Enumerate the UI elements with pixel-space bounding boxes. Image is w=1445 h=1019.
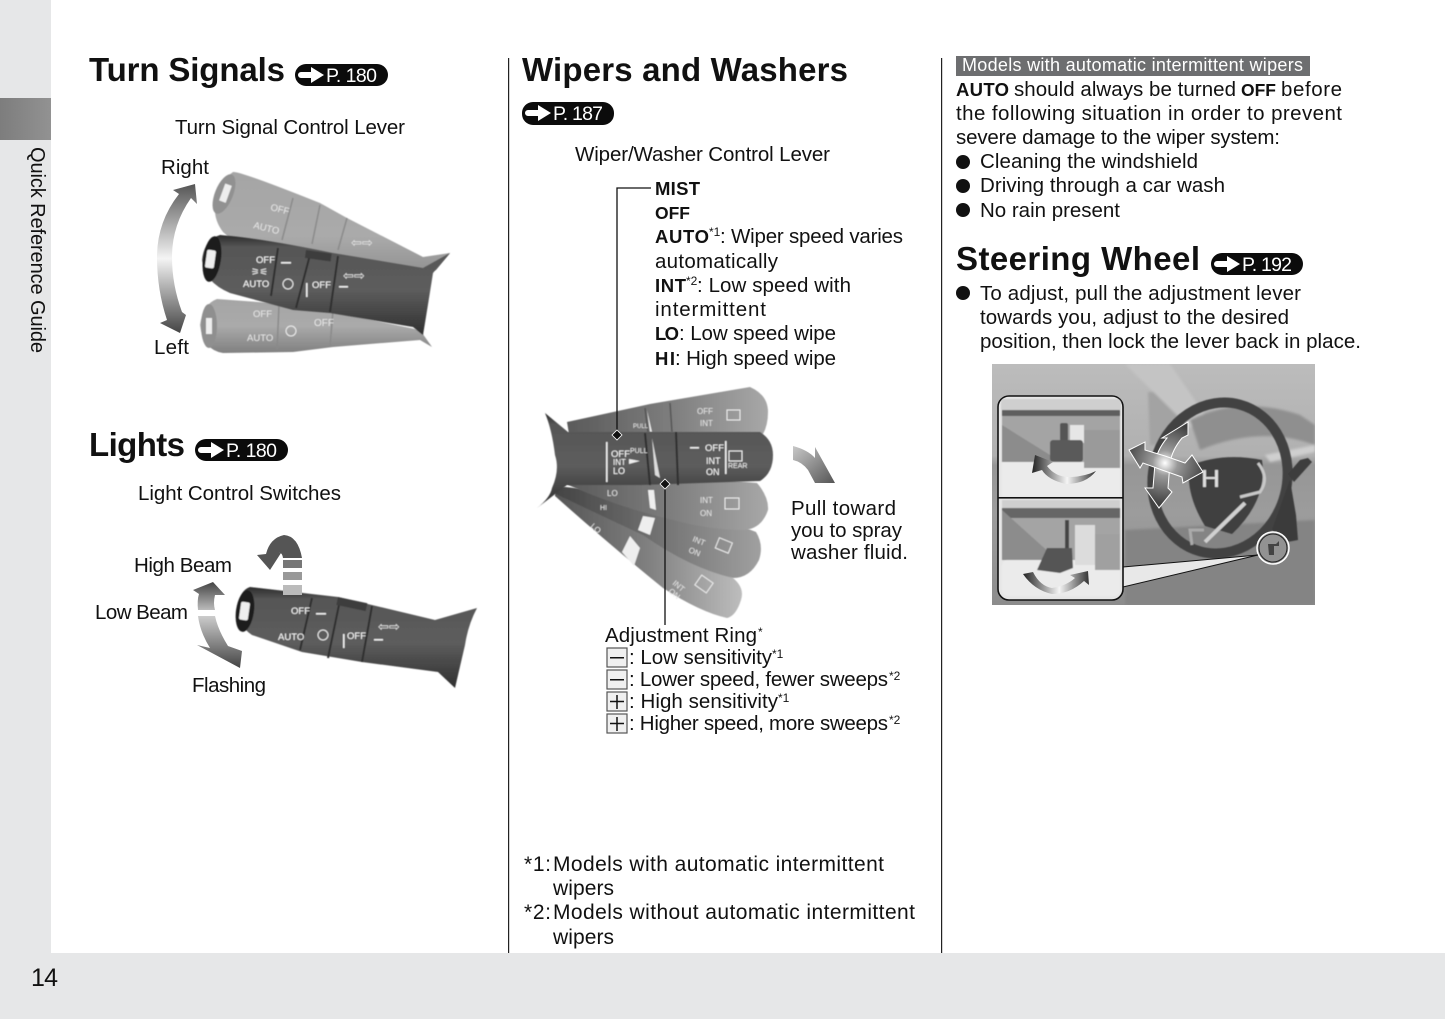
leader line to adjustment ring (664, 486, 666, 625)
marker diamond: ring leader (660, 479, 670, 489)
inset divider (998, 497, 1123, 499)
adjustment ring legend: *1 (778, 691, 790, 705)
wiper settings list: MIST (655, 178, 701, 199)
sidebar label: Quick Reference Guide: Quick Reference Guide (26, 147, 48, 353)
illustration: main wiper lever: REAR (728, 463, 747, 470)
illustration: lowest ghost lever (555, 488, 742, 618)
adjustment ring legend: *1 (772, 647, 784, 661)
illustration: third ghost lever: INT (691, 535, 707, 548)
illustration: lower ghost lever: OFF (314, 318, 334, 329)
wiper settings list (655, 178, 903, 370)
wiper settings list: : High speed wipe (675, 347, 836, 370)
caption: Light Control Switches: Light Control Switches (138, 482, 341, 505)
illustration: upper ghost lever: OFF (269, 202, 291, 218)
illustration: lever (233, 587, 477, 688)
panel: lights (89, 426, 477, 697)
lower inset scene (1001, 500, 1121, 574)
panel: automatic intermittent wipers note (956, 55, 1342, 222)
steering wheel rim and hub (1146, 396, 1312, 558)
text: pull toward you: washer fluid. (790, 541, 908, 564)
footnotes: wipers (552, 926, 614, 949)
page reference P. 180: P. 180 (326, 65, 377, 87)
heading: Lights: Lights (89, 426, 185, 463)
illustration: lowest ghost lever: LO (589, 522, 603, 535)
illustration: main wiper lever: INT (706, 456, 721, 466)
illustration: lower ghost lever: OFF (253, 309, 272, 320)
adjustment ring legend: *2 (889, 713, 901, 727)
paragraph: the following situation in order to prevent (956, 102, 1342, 125)
wiper settings list: AUTO (655, 226, 709, 247)
icon: low beam and flashing arrows (193, 582, 242, 668)
lower inset arrow (1023, 571, 1089, 594)
adjustment instructions: position, then lock the lever back in place. (980, 330, 1361, 353)
paragraph: AUTO (956, 79, 1009, 100)
illustration: upper ghost lever: INT (700, 419, 713, 428)
tag text: Models with automatic intermittent wipers (962, 55, 1303, 75)
illustration: upper ghost lever: AUTO (252, 220, 280, 237)
wiper settings list: automatically (655, 250, 779, 273)
label: Flashing: Flashing (192, 674, 266, 697)
wiper settings list: intermittent (655, 298, 766, 321)
icon: double curved arrow (157, 184, 197, 333)
illustration: lower ghost lever: AUTO (247, 333, 273, 344)
illustration: main wiper lever: LO (613, 466, 625, 476)
illustration: third ghost lever (556, 486, 761, 578)
paragraph: before (1281, 78, 1342, 101)
illustration: main wiper lever: PULL (630, 448, 648, 455)
upper inset arrow (1032, 455, 1096, 484)
page reference P. 192 (1211, 253, 1303, 276)
adjustment cross arrows (1129, 422, 1203, 508)
illustration: main wiper lever: ON (706, 467, 720, 477)
panel: turn signals (89, 51, 450, 359)
footnotes: Models without automatic intermittent (553, 901, 915, 924)
panel: wipers and washers (522, 51, 915, 949)
heading: Wipers and Washers: Wipers and Washers (522, 51, 848, 88)
page reference P. 192: P. 192 (1242, 254, 1292, 276)
illustration: steering wheel photo (992, 364, 1315, 605)
page reference P. 180 (195, 439, 288, 462)
label: Right: Right (161, 156, 209, 179)
illustration: main lever: ⇦⇨ (343, 268, 365, 283)
wiper settings list: HI (655, 348, 675, 369)
adjustment ring legend: * (758, 625, 763, 639)
illustration: lower ghost lever (200, 299, 432, 353)
adjustment instructions: towards you, adjust to the desired (980, 306, 1289, 329)
bullet list: No rain present (980, 199, 1120, 222)
illustration: main lever (200, 235, 450, 335)
leader line to MIST-HI settings (617, 188, 651, 435)
illustration: main wiper lever (537, 413, 773, 508)
bullet list: Cleaning the windshield (980, 150, 1198, 173)
paragraph (956, 78, 1342, 149)
icon: high beam arrow (257, 535, 302, 595)
footnotes (524, 853, 915, 949)
adjustment ring legend: : Low sensitivity (629, 646, 773, 669)
bottom band (0, 953, 1445, 1019)
illustration: second ghost lever (566, 478, 768, 530)
icon: pull arrow (793, 446, 835, 483)
bullet list (956, 150, 1225, 222)
adjustment ring legend: *2 (889, 669, 901, 683)
illustration: main lever: OFF (256, 255, 275, 266)
inset panels (998, 396, 1123, 600)
illustration: lowest ghost lever: ON (667, 587, 682, 601)
illustration: lever: AUTO (278, 632, 304, 643)
illustration: upper ghost lever (208, 171, 450, 300)
illustration: upper ghost lever: ⇦⇨ (351, 235, 373, 250)
page reference P. 187: P. 187 (553, 103, 603, 125)
heading: Turn Signals: Turn Signals (89, 51, 285, 88)
illustration: main lever: ⚞⚟ (251, 267, 268, 278)
wiper settings list: : Low speed with (697, 274, 851, 297)
illustration: main wiper lever: OFF (611, 449, 630, 460)
page reference P. 180 (295, 64, 388, 87)
adjustment ring legend: Adjustment Ring (605, 624, 757, 647)
illustration: second ghost lever: LO (607, 489, 618, 498)
sidebar background (0, 0, 51, 1019)
sidebar active tab (0, 98, 51, 140)
illustration: second ghost lever: ON (700, 509, 712, 518)
illustration: upper ghost lever: PULL (633, 424, 649, 430)
adjustment ring legend: : High sensitivity (629, 690, 779, 713)
illustration: second ghost lever: INT (700, 496, 713, 505)
adjustment instructions (956, 282, 1361, 353)
illustration: main lever: OFF (312, 280, 331, 291)
text: pull toward you: you to spray (791, 519, 903, 542)
paragraph: should always be turned (1014, 78, 1236, 101)
label: High Beam: High Beam (134, 554, 232, 577)
footnotes: wipers (552, 877, 614, 900)
callout wedge to insets (1123, 555, 1258, 587)
paragraph: OFF (1241, 80, 1276, 100)
wiper settings list: *1 (709, 225, 721, 239)
wiper settings list: LO (655, 323, 679, 344)
illustration: upper ghost lever: OFF (697, 407, 713, 416)
page number: 14 (31, 964, 58, 992)
illustration: third ghost lever: ON (687, 546, 702, 558)
wiper settings list: *2 (686, 274, 698, 288)
paragraph: severe damage to the wiper system: (956, 126, 1280, 149)
caption: Turn Signal Control Lever: Turn Signal Control Lever (175, 116, 405, 139)
illustration: third ghost lever: HI (600, 505, 607, 512)
label: Left: Left (154, 336, 189, 359)
caption: Wiper/Washer Control Lever: Wiper/Washer Control Lever (575, 143, 830, 166)
illustration: lowest ghost lever: INT (671, 579, 686, 594)
footnotes: Models with automatic intermittent (553, 853, 884, 876)
upper inset scene (1000, 398, 1122, 468)
adjustment ring legend: : Lower speed, fewer sweeps (629, 668, 888, 691)
page reference P. 180: P. 180 (226, 440, 277, 462)
page reference P. 187 (522, 102, 614, 125)
text: pull toward you (790, 497, 908, 564)
illustration: main wiper lever: INT (613, 458, 626, 467)
adjustment ring legend: : Higher speed, more sweeps (629, 712, 888, 735)
adjustment instructions: To adjust, pull the adjustment lever (980, 282, 1301, 305)
text: pull toward you: Pull toward (791, 497, 896, 520)
illustration: upper ghost lever (567, 387, 768, 440)
lever detail circle (1257, 532, 1289, 564)
wiper settings list: INT (655, 275, 687, 296)
illustration: lever: OFF (291, 606, 310, 617)
illustration: main wiper lever: OFF (705, 443, 724, 454)
marker diamond: upper leader (612, 430, 622, 440)
label: Low Beam: Low Beam (95, 601, 188, 624)
heading: Steering Wheel: Steering Wheel (956, 240, 1200, 277)
tag background (956, 56, 1310, 76)
adjustment ring legend (605, 624, 901, 735)
illustration: lever: ⇦⇨ (378, 619, 400, 634)
illustration: lever: OFF (347, 631, 366, 642)
wiper settings list: : Low speed wipe (679, 322, 836, 345)
footnotes: *2: (524, 901, 551, 924)
illustration: main lever: AUTO (243, 279, 269, 290)
bullet list: Driving through a car wash (980, 174, 1225, 197)
footnotes: *1: (524, 853, 551, 876)
wiper settings list: OFF (655, 203, 690, 223)
wiper settings list: : Wiper speed varies (720, 225, 903, 248)
panel: steering wheel (956, 240, 1361, 605)
